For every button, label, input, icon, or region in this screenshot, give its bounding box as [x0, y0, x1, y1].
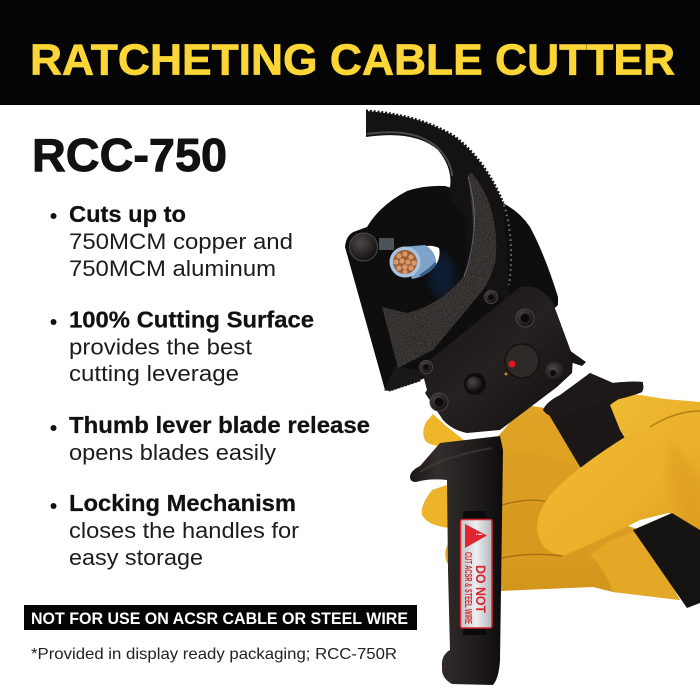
- right handle upper: [543, 373, 643, 480]
- handle warning label: CUT ACSR & STEEL WIRE: [462, 552, 473, 624]
- handle warning label: !: [474, 533, 483, 536]
- textured moving jaw: [382, 173, 496, 368]
- feature: cutting surface: [50, 306, 314, 386]
- glove: palm and fingers: [495, 405, 680, 600]
- feature: thumb lever: [50, 412, 370, 465]
- locking lever: [569, 350, 586, 366]
- title banner: [0, 0, 700, 105]
- left handle: [410, 436, 503, 685]
- feature: cutting capacity: [50, 201, 293, 281]
- model heading: RCC-750: [32, 129, 227, 181]
- feature: thumb lever: Thumb lever blade release: [69, 412, 370, 438]
- warning bar: NOT FOR USE ON ACSR CABLE OR STEEL WIRE: [31, 610, 408, 628]
- cable opening: [421, 246, 440, 265]
- feature: cutting surface: 100% Cutting Surface: [69, 306, 314, 332]
- upper blade: [366, 111, 510, 300]
- feature: locking mechanism: Locking Mechanism: [69, 490, 296, 516]
- feature: cutting capacity: 750MCM copper and: [69, 229, 293, 254]
- rear plate: [345, 186, 558, 390]
- feature: locking mechanism: closes the handles for: [69, 518, 300, 543]
- handle warning label: [460, 511, 492, 635]
- glove: back of hand: [610, 395, 700, 535]
- right handle lower: [633, 513, 700, 608]
- glove: thumb: [537, 410, 700, 555]
- thumb lever release button: [504, 344, 539, 378]
- feature: thumb lever: opens blades easily: [69, 440, 277, 465]
- lower jaw teeth: [385, 366, 424, 391]
- feature: locking mechanism: easy storage: [69, 545, 203, 570]
- feature: cutting surface: provides the best: [69, 334, 253, 360]
- right handle flange overlay: [543, 373, 644, 417]
- head bolts: [420, 290, 565, 411]
- cutter head plate: [420, 286, 586, 433]
- cable: [390, 245, 436, 279]
- ratchet teeth dots: [504, 205, 511, 285]
- feature: cutting capacity: 750MCM aluminum: [69, 256, 276, 281]
- feature: cutting capacity: Cuts up to: [69, 201, 186, 227]
- pivot bolt: [350, 233, 394, 261]
- glove: left finger tips: [422, 414, 470, 565]
- footnote: *Provided in display ready packaging; RCC-750R: [31, 646, 397, 663]
- feature: cutting surface: cutting leverage: [69, 361, 239, 386]
- handle warning label: DO NOT: [473, 565, 489, 613]
- cable opening shadow: [429, 253, 455, 297]
- feature: locking mechanism: [50, 490, 300, 570]
- title banner: RATCHETING CABLE CUTTER: [30, 36, 675, 84]
- photo: gloved hand holding cable cutter: [345, 111, 700, 685]
